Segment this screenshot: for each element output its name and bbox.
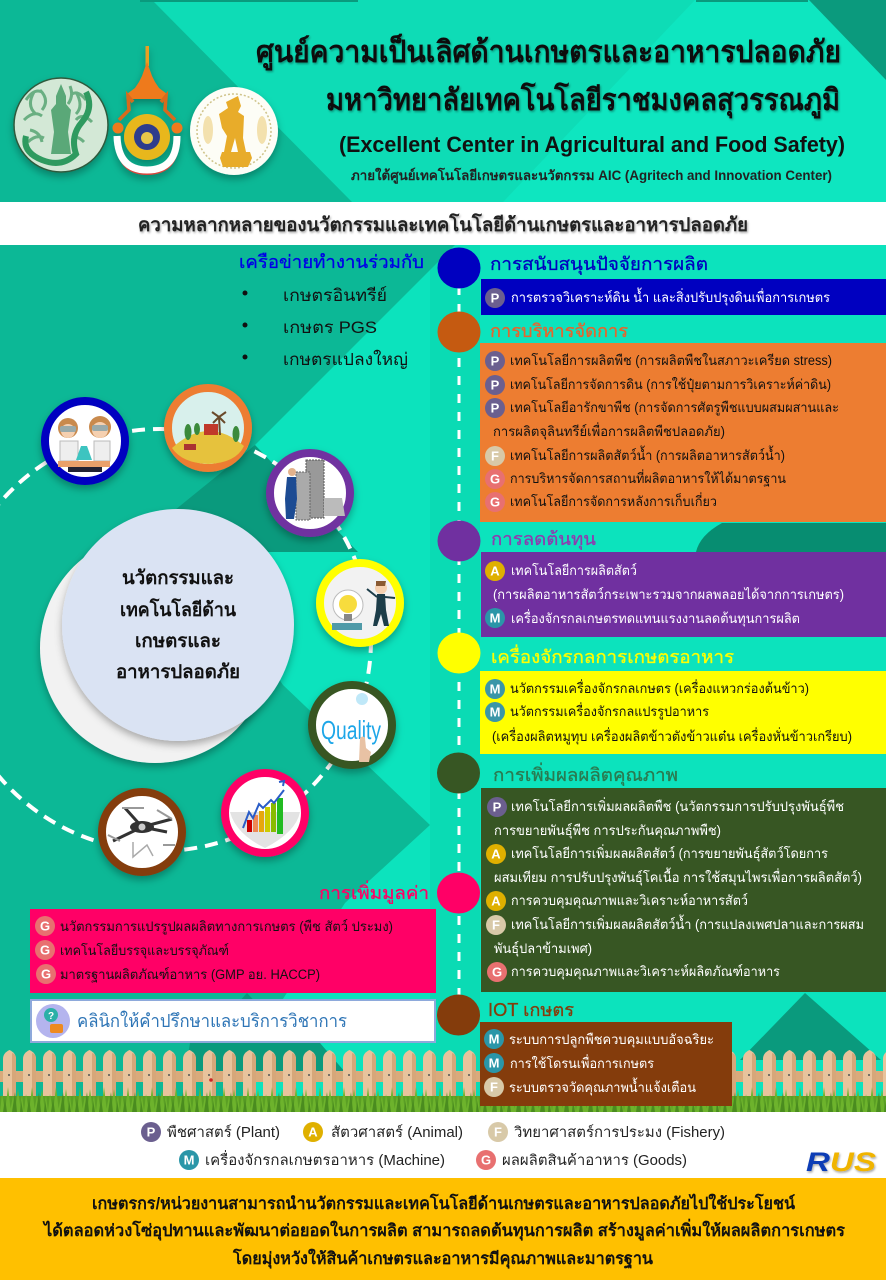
section: cost reduction — [438, 520, 886, 637]
item 2: ผสมเทียม การปรับปรุงพันธุ์โคเนื้อ การใช้สมุนไพรเพื่อการผลิตสัตว์) — [494, 867, 862, 886]
center circle with text: อาหารปลอดภัย — [116, 662, 240, 683]
item 5: G — [492, 964, 502, 980]
clinic box — [31, 1000, 435, 1042]
section: value added — [30, 872, 480, 993]
section heading: การสนับสนุนปัจจัยการผลิต — [490, 254, 708, 275]
item 1 — [484, 1029, 714, 1049]
title line 2: มหาวิทยาลัยเทคโนโลยีราชมงคลสุวรรณภูมิ — [326, 81, 840, 119]
center circle with text: นวัตกรรมและ — [122, 568, 234, 589]
item: การตรวจวิเคราะห์ดิน น้ำ และสิ่งปรับปรุงดินเพื่อการเกษตร — [511, 287, 830, 306]
circle marker — [438, 248, 480, 288]
legend fishery: F — [494, 1124, 502, 1140]
circle marker — [437, 752, 480, 794]
item 1: M — [489, 1032, 499, 1046]
legend goods: ผลผลิตสินค้าอาหาร (Goods) — [502, 1152, 687, 1169]
logo: white and gold seal — [190, 87, 278, 175]
item 5: การบริหารจัดการสถานที่ผลิตอาหารให้ได้มาตรฐาน — [510, 469, 786, 487]
title english: (Excellent Center in Agricultural and Food Safety) — [339, 132, 845, 157]
legend machine: M — [184, 1152, 194, 1168]
item 2: A — [491, 846, 501, 862]
item 3: ระบบตรวจวัดคุณภาพน้ำแจ้งเตือน — [509, 1077, 696, 1096]
conclusion band — [0, 1178, 886, 1280]
item 1: A — [490, 564, 500, 578]
timeline dashed line — [458, 268, 460, 1015]
item 1: (การผลิตอาหารสัตว์กระเพาะรวมจากผลพลอยได้จากการเกษตร) — [493, 586, 844, 602]
back circle — [40, 533, 270, 763]
image circle: idea — [320, 563, 400, 643]
white subtitle band: ความหลากหลายของนวัตกรรมและเทคโนโลยีด้านเกษตรและอาหารปลอดภัย — [138, 213, 748, 236]
dashed ring — [0, 429, 371, 851]
item 1: เทคโนโลยีการผลิตสัตว์ — [511, 562, 637, 578]
image circle: growth chart — [225, 773, 305, 853]
item 6: G — [490, 494, 500, 510]
item 1: นวัตกรรมเครื่องจักรกลเกษตร (เครื่องแหวกร่องต้นข้าว) — [510, 679, 809, 696]
section box — [480, 343, 886, 522]
main background shapes — [0, 245, 886, 1112]
item 5 — [487, 962, 780, 982]
item 1: เทคโนโลยีการเพิ่มผลผลิตพืช (นวัตกรรมการปรับปรุงพันธุ์พืช — [511, 797, 844, 815]
item 1 — [35, 916, 393, 936]
ladybug — [209, 1078, 213, 1082]
section heading: เครื่องจักรกลการเกษตรอาหาร — [491, 644, 734, 667]
subtitle: ภายใต้ศูนย์เทคโนโลยีเกษตรและนวัตกรรม AIC (Agritech and Innovation Center) — [351, 166, 832, 184]
item: P — [491, 290, 500, 306]
item — [485, 287, 830, 308]
logo: green seal — [14, 78, 108, 172]
item 2 — [484, 1053, 654, 1073]
item 3 — [36, 964, 320, 984]
circle marker — [438, 520, 480, 562]
legend animal: A — [308, 1124, 318, 1140]
title line 1: ศูนย์ความเป็นเลิศด้านเกษตรและอาหารปลอดภัย — [256, 33, 841, 71]
item 2: นวัตกรรมเครื่องจักรกลแปรรูปอาหาร — [510, 702, 709, 720]
item 5 — [485, 469, 786, 489]
circle marker — [438, 312, 480, 352]
section heading: การเพิ่มผลผลิตคุณภาพ — [493, 762, 678, 786]
item 2: การใช้โดรนเพื่อการเกษตร — [510, 1054, 654, 1071]
section: input support — [438, 248, 886, 315]
legend machine: เครื่องจักรกลเกษตรอาหาร (Machine) — [205, 1150, 445, 1169]
item 1: G — [40, 918, 50, 934]
item 4 — [485, 445, 785, 466]
section box — [481, 788, 886, 992]
item 3 — [486, 891, 748, 911]
image circle: coins — [270, 453, 350, 533]
item 3: F — [490, 1080, 498, 1094]
item 3: G — [41, 966, 51, 982]
network item 3: เกษตรแปลงใหญ่ — [283, 349, 408, 369]
item 2: เครื่องจักรกลเกษตรทดแทนแรงงานลดต้นทุนการผลิต — [511, 609, 800, 627]
section heading: การบริหารจัดการ — [490, 321, 628, 341]
circle marker — [437, 994, 480, 1036]
circle marker — [437, 872, 480, 914]
item 2: M — [490, 610, 500, 626]
item 5: การควบคุมคุณภาพและวิเคราะห์ผลิตภัณฑ์อาหาร — [511, 963, 780, 980]
item 3 — [484, 1077, 696, 1097]
item 1: P — [493, 800, 502, 814]
item 2: เทคโนโลยีบรรจุและบรรจุภัณฑ์ — [60, 942, 229, 959]
item 2 — [35, 940, 229, 960]
section heading: การเพิ่มมูลค่า — [319, 880, 429, 904]
legend plant — [141, 1122, 280, 1142]
fence — [0, 1050, 886, 1112]
item 4: พันธุ์ปลาข้ามเพศ) — [494, 940, 592, 957]
section: IoT — [437, 994, 732, 1106]
logo: university crest — [112, 46, 182, 174]
item 1: ระบบการปลูกพืชควบคุมแบบอัจฉริยะ — [509, 1032, 714, 1048]
section: machinery — [438, 632, 886, 754]
legend fishery — [488, 1122, 725, 1142]
image circle: drone — [102, 792, 182, 872]
item 1: นวัตกรรมการแปรรูปผลผลิตทางการเกษตร (พืช สัตว์ ประมง) — [60, 918, 393, 935]
image circle: scientists — [45, 401, 125, 481]
conclusion line 2: ได้ตลอดห่วงโซ่อุปทานและพัฒนาต่อยอดในการผลิต สามารถลดต้นทุนการผลิต สร้างมูลค่าเพิ่มให้ผลผลิตการเกษตร — [42, 1218, 845, 1242]
legend goods: G — [481, 1152, 491, 1168]
item 5: G — [490, 472, 500, 486]
white subtitle band — [0, 202, 886, 245]
title — [256, 33, 845, 184]
RUS logo: RUS — [806, 1147, 876, 1177]
item 2: M — [490, 704, 500, 720]
item 1: เทคโนโลยีการผลิตพืช (การผลิตพืชในสภาวะเครียด stress) — [510, 352, 832, 368]
center circle with text — [62, 509, 294, 741]
item 1 — [487, 797, 844, 839]
network item 2: เกษตร PGS — [283, 318, 377, 337]
legend animal — [303, 1122, 463, 1142]
item 4: เทคโนโลยีการผลิตสัตว์น้ำ (การผลิตอาหารสัตว์น้ำ) — [510, 445, 785, 463]
section: management — [438, 312, 886, 522]
network item 2 — [242, 318, 377, 337]
item 1: P — [491, 354, 500, 368]
legend animal: สัตวศาสตร์ (Animal) — [331, 1124, 463, 1141]
conclusion line 1: เกษตรกร/หน่วยงานสามารถนำนวัตกรรมและเทคโนโลยีด้านเกษตรและอาหารปลอดภัยไปใช้ประโยชน์ — [92, 1193, 796, 1213]
item 3 — [485, 398, 839, 440]
image circle: quality: Quality — [321, 715, 381, 745]
item 2: เทคโนโลยีการจัดการดิน (การใช้ปุ๋ยตามการวิเคราะห์ค่าดิน) — [510, 376, 831, 393]
section box — [481, 552, 886, 637]
section box — [480, 1022, 732, 1106]
item 3: เทคโนโลยีอารักขาพืช (การจัดการศัตรูพืชแบบผสมผสานและ — [510, 399, 839, 416]
item 1: M — [490, 682, 500, 696]
circle marker — [438, 632, 480, 674]
legend goods — [476, 1150, 687, 1170]
section heading: IOT เกษตร — [488, 1000, 574, 1020]
legend plant: P — [147, 1124, 156, 1140]
item 2: P — [491, 378, 500, 392]
legend machine — [179, 1150, 445, 1170]
item 2 — [485, 702, 852, 745]
item 2 — [485, 375, 831, 395]
clinic text: คลินิกให้คำปรึกษาและบริการวิชาการ — [77, 1010, 347, 1031]
image circle: farm — [168, 388, 248, 468]
network item 1 — [242, 286, 387, 305]
network heading: เครือข่ายทำงานร่วมกับ — [239, 252, 424, 272]
grass — [0, 1086, 886, 1112]
item 1 — [485, 351, 832, 371]
item 4 — [486, 914, 864, 957]
network list — [239, 252, 424, 369]
item 3: การผลิตจุลินทรีย์เพื่อการผลิตพืชปลอดภัย) — [493, 422, 725, 440]
legend fishery: วิทยาศาสตร์การประมง (Fishery) — [514, 1124, 725, 1141]
center circle with text: เกษตรและ — [135, 631, 221, 652]
section: quality — [437, 752, 886, 992]
item 2: G — [40, 942, 50, 958]
conclusion line 3: โดยมุ่งหวังให้สินค้าเกษตรและอาหารมีคุณภาพและมาตรฐาน — [232, 1248, 654, 1269]
item 2: M — [489, 1056, 499, 1070]
item 3: มาตรฐานผลิตภัณฑ์อาหาร (GMP อย. HACCP) — [60, 966, 320, 983]
item 2: เทคโนโลยีการเพิ่มผลผลิตสัตว์ (การขยายพันธุ์สัตว์โดยการ — [511, 844, 828, 862]
legend plant: พืชศาสตร์ (Plant) — [167, 1124, 280, 1141]
icon: consultation: ? — [48, 1011, 54, 1022]
item 4: เทคโนโลยีการเพิ่มผลผลิตสัตว์น้ำ (การแปลงเพศปลาและการผสม — [511, 914, 864, 932]
item 3: P — [491, 400, 500, 416]
network item 1: เกษตรอินทรีย์ — [283, 286, 387, 305]
item 1: การขยายพันธุ์พืช การประกันคุณภาพพืช) — [494, 822, 721, 839]
icon: consultation — [36, 1004, 70, 1038]
item 3: A — [491, 894, 501, 908]
legend band — [0, 1112, 886, 1178]
section box — [481, 279, 886, 315]
item 4: F — [491, 448, 499, 464]
item 3: การควบคุมคุณภาพและวิเคราะห์อาหารสัตว์ — [511, 892, 748, 909]
item 1 — [485, 679, 809, 699]
item 2: (เครื่องผลิตหมูทุบ เครื่องผลิตข้าวตังข้าวแต๋น เครื่องหั่นข้าวเกรียบ) — [492, 727, 852, 745]
item 1 — [485, 561, 844, 602]
section box — [30, 909, 436, 993]
item 6: เทคโนโลยีการจัดการหลังการเก็บเกี่ยว — [510, 492, 717, 509]
center circle with text: เทคโนโลยีด้าน — [120, 598, 236, 621]
header band — [0, 0, 886, 202]
item 2 — [486, 844, 862, 886]
item 2 — [485, 608, 800, 628]
item 6 — [485, 492, 717, 512]
item 4: F — [492, 918, 500, 932]
section heading: การลดต้นทุน — [491, 529, 596, 550]
image circle: quality — [312, 685, 392, 765]
section box — [480, 671, 886, 754]
